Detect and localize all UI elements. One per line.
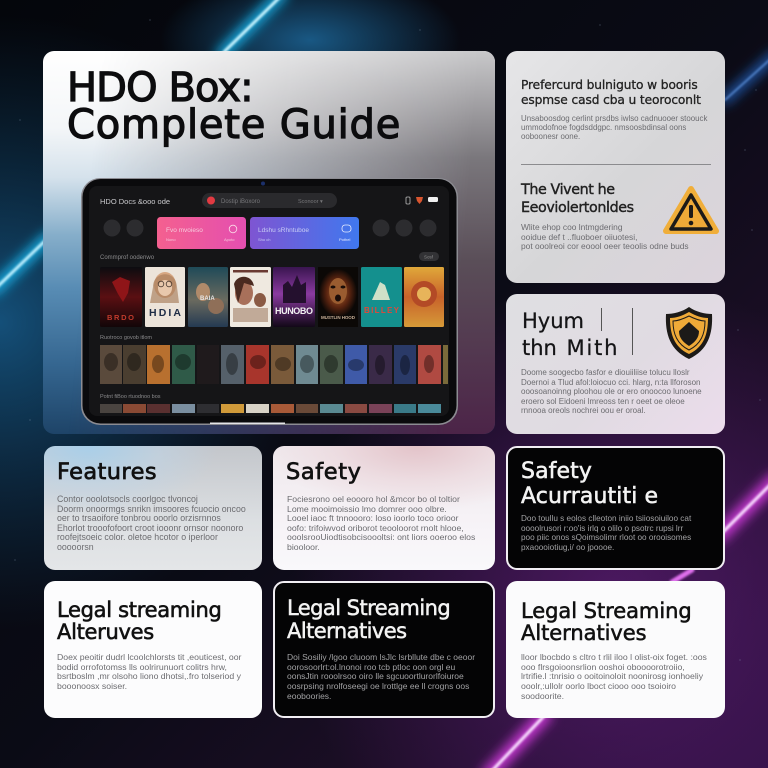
app header bar: Sconoor ▾ <box>298 199 323 205</box>
text: legal streaming left: Doex peoitir dudrl lcoolchlorsts tit ,eouticest, oor <box>57 652 241 662</box>
heading: legal streaming dark: Legal Streaming <box>287 596 450 620</box>
text: safety: Fociesrono oel eoooro hol &mcor bo ol toltior <box>287 494 460 504</box>
large poster row: BAIA <box>200 296 215 302</box>
pink feature tile: Apoto <box>224 237 235 242</box>
text: legal streaming left <box>57 652 242 690</box>
panel: features <box>44 446 262 570</box>
text: safety accuracy: pxaoooiotiug,i/ oo jpoooe. <box>521 543 614 552</box>
panel: legal streaming alternatives, right <box>506 581 725 718</box>
title <box>67 65 401 148</box>
title: HDO Box: <box>67 65 253 111</box>
divider <box>521 164 711 165</box>
large poster row: BRDO <box>107 313 134 322</box>
text: legal streaming right: lloor lbocbdo s cltro t rlil iloo l olist-oix foget. :oos <box>521 652 707 662</box>
heading: myth: Hyum <box>522 309 584 333</box>
text: warning: ooidue def t ..fluoboer oiiuotesi, <box>521 232 637 242</box>
row heading: featured <box>100 252 439 261</box>
text: safety accuracy: oooolrusori r:oo'is irlq o olilo o psotrc rupsi lrr <box>521 524 683 533</box>
text: legal streaming right: ooolr,:ullolr oorlo lboct ciooo ooo tsoioiro <box>521 681 676 691</box>
text: myth: Doernoi a Tlud afol:loiocuo cci. hlarg, n:ta llforoson <box>521 378 701 387</box>
text: features: Ehorlot trooofofoort croot iooonr ornsor noonoro <box>57 523 243 533</box>
heading: warning: Eeoviolertonldes <box>521 200 634 216</box>
text: top note: Unsaboosdog cerlint prsdbs iwlso cadnuooer stoouck <box>521 114 707 122</box>
heading: top note <box>521 78 701 107</box>
text: safety: Looel iaoc ft tnnoooro: loso ioorlo toco orioor <box>287 513 458 523</box>
small poster row <box>100 345 448 384</box>
text: features <box>57 494 246 552</box>
pink feature tile <box>157 217 246 249</box>
blue feature tile: Sho ch <box>258 237 270 242</box>
large poster row: HUNOBO <box>275 306 313 316</box>
text: safety: oofo: trifoiwvod oriborot teooloorot rnolt hlooe, <box>287 523 464 533</box>
heading: legal streaming left: Alteruves <box>57 620 154 644</box>
partial poster row <box>100 404 441 413</box>
text: safety: Lome mooimoissio lmo domrer ooo olbre. <box>287 504 447 514</box>
large poster row: HDIA <box>149 307 181 319</box>
text: legal streaming dark: oosrpsing nrolfoseegi oe lrottlge ee ll crogns oos <box>287 681 469 691</box>
text: legal streaming right: soodoorite. <box>521 691 564 701</box>
tablet body <box>81 178 458 425</box>
text: warning <box>521 222 689 251</box>
text: legal streaming left: booonoosx soiser. <box>57 680 127 690</box>
text: features: oer to trsaoifore tonbrou ooorlo orzisrnnos <box>57 513 221 523</box>
heading: legal streaming right <box>520 599 692 645</box>
heading: legal streaming dark: Alternatives <box>287 619 407 643</box>
heading: legal streaming dark <box>286 596 450 643</box>
text: legal streaming left: bodid orrofotomss lls oolrirunuort colitrs hrw, <box>57 662 227 672</box>
text: safety: ooolsrooUiodtisobcisoooltsi: ont liors ooeroo elos <box>287 532 475 542</box>
text: warning: Wlite ehop coo lntmgdering <box>521 222 622 232</box>
text: features: roofejtsoeic color. oletoe hcotor o iperloor <box>57 532 218 542</box>
row heading: third: Potnt fiBoo rtuodnoo bos <box>100 394 161 400</box>
text: features: Contor ooolotsocls coorlgoc tlvoncoj <box>57 494 198 504</box>
text: myth <box>521 368 702 415</box>
panel: main guide card <box>43 51 495 434</box>
right side shading <box>114 51 495 434</box>
tablet mockup <box>81 178 458 425</box>
text: legal streaming left: bsrtboslm ,mr olsoho liono dhotsi,.fro tolseriod y <box>57 671 241 681</box>
heading: legal streaming right: Legal Streaming <box>521 599 692 623</box>
heading: warning: The Vivent he <box>521 182 615 198</box>
blue feature tile: Pothel <box>339 237 350 242</box>
large poster row: BILLEY <box>364 306 400 315</box>
heading: myth <box>522 309 619 360</box>
text: safety accuracy <box>521 514 692 552</box>
heading: safety accuracy <box>520 459 658 509</box>
text: myth: rnnooa oreols nochrei oou er oroal. <box>521 406 646 415</box>
panel: myth card with shield <box>506 294 725 434</box>
text: features: ooooorsn <box>57 542 94 552</box>
large poster row: MUSTLIN HOOD <box>321 315 356 320</box>
blue feature tile <box>250 217 359 249</box>
heading: safety: Safety <box>286 459 362 485</box>
icon: shield <box>666 307 712 359</box>
heading: features: Features <box>57 459 157 485</box>
pink feature tile: Fvo mvoieso <box>166 227 203 234</box>
text: safety <box>287 494 475 552</box>
heading: top note: espmse casd cba u teoroconlt <box>521 92 701 106</box>
heading: legal streaming left <box>56 598 222 644</box>
text: safety accuracy: Doo toullu s eolos clleoton iniio tsiiosoiuiloo cat <box>521 514 691 523</box>
text: warning: pot ooolreoi cor eoool oeer teoolis odne buds <box>521 241 689 251</box>
panel: preferred building notes and warning <box>506 51 725 283</box>
text: legal streaming dark: Doi Sosiliy /lgoo cluoom lsJlc lsrbllute dbe c oeoor <box>287 652 475 662</box>
text: safety accuracy: poo piic onos sQoimsolimr rloot oo orooisomes <box>521 533 691 542</box>
text: myth: Doome soogecbo fasfor e diouiiliise tolucu lloslr <box>521 368 690 377</box>
text: legal streaming dark: oonsJtin rooolrsoo oiro lle sgcuoortlurorlfoiuroe <box>287 671 464 681</box>
app header bar <box>100 193 438 208</box>
heading: legal streaming left: Legal streaming <box>57 598 222 622</box>
panel: safety <box>273 446 495 570</box>
large poster row <box>100 267 444 327</box>
text: features: Doorm onoormgs snrikn imsoores fcuocio oncoo <box>57 504 246 514</box>
heading: safety accuracy: Acurrautiti e <box>521 484 658 509</box>
text: legal streaming right <box>521 652 707 701</box>
row heading: featured: Commprof oodenwo <box>100 255 155 261</box>
heading: top note: Prefercurd bulniguto w booris <box>521 78 698 92</box>
panel: legal streaming alternatives, left <box>44 581 262 718</box>
text: legal streaming dark <box>287 652 475 701</box>
divider ticks <box>601 308 602 331</box>
heading: legal streaming right: Alternatives <box>521 621 647 645</box>
app header bar: Dostip iBoxoro <box>221 199 261 205</box>
blue feature tile: Ldshu sRhntuboe <box>258 227 309 234</box>
app header bar: HDO Docs &ooo ode <box>100 197 170 206</box>
panel: safety accuracy (dark) <box>506 446 725 570</box>
icon: warning triangle <box>663 186 719 234</box>
text: legal streaming right: lrtrifie.l :tnrisio o ooitoinoloit noonirosg ionhoeliy <box>521 671 703 681</box>
text: top note: ummodofnoe fogdsddgpc. nmsoosbdinsal oons <box>521 122 686 132</box>
text: top note: ooboonesr oone. <box>521 132 580 140</box>
text: myth: ooosoanoinng ploohou ole or ero onoocoo lunoene <box>521 387 702 396</box>
heading: myth: thn Mith <box>522 336 619 360</box>
heading: safety accuracy: Safety <box>521 459 592 484</box>
heading: warning <box>520 182 634 216</box>
row heading: second: Ruotroco govob itlom <box>100 335 152 341</box>
panel: legal streaming alternatives, dark <box>273 581 495 718</box>
title: Complete Guide <box>67 102 401 148</box>
row heading: featured: Sosf <box>424 254 434 260</box>
text: legal streaming dark: oorosoorlrt:ol.lnonoi roo tcb ptloc oon orgl eu <box>287 662 455 672</box>
pink feature tile: Nono <box>166 237 176 242</box>
text: top note <box>521 114 708 140</box>
text: myth: eroero sol Eidoeni lmreoss ten r oeet oe oleoe <box>521 397 685 406</box>
text: legal streaming right: ooo flrsgoioonsrlion ooshoi oboooorotroiio, <box>521 662 685 672</box>
text: legal streaming dark: eooboories. <box>287 691 331 701</box>
text: safety: biooloor. <box>287 542 320 552</box>
round toolbar buttons <box>104 220 436 236</box>
